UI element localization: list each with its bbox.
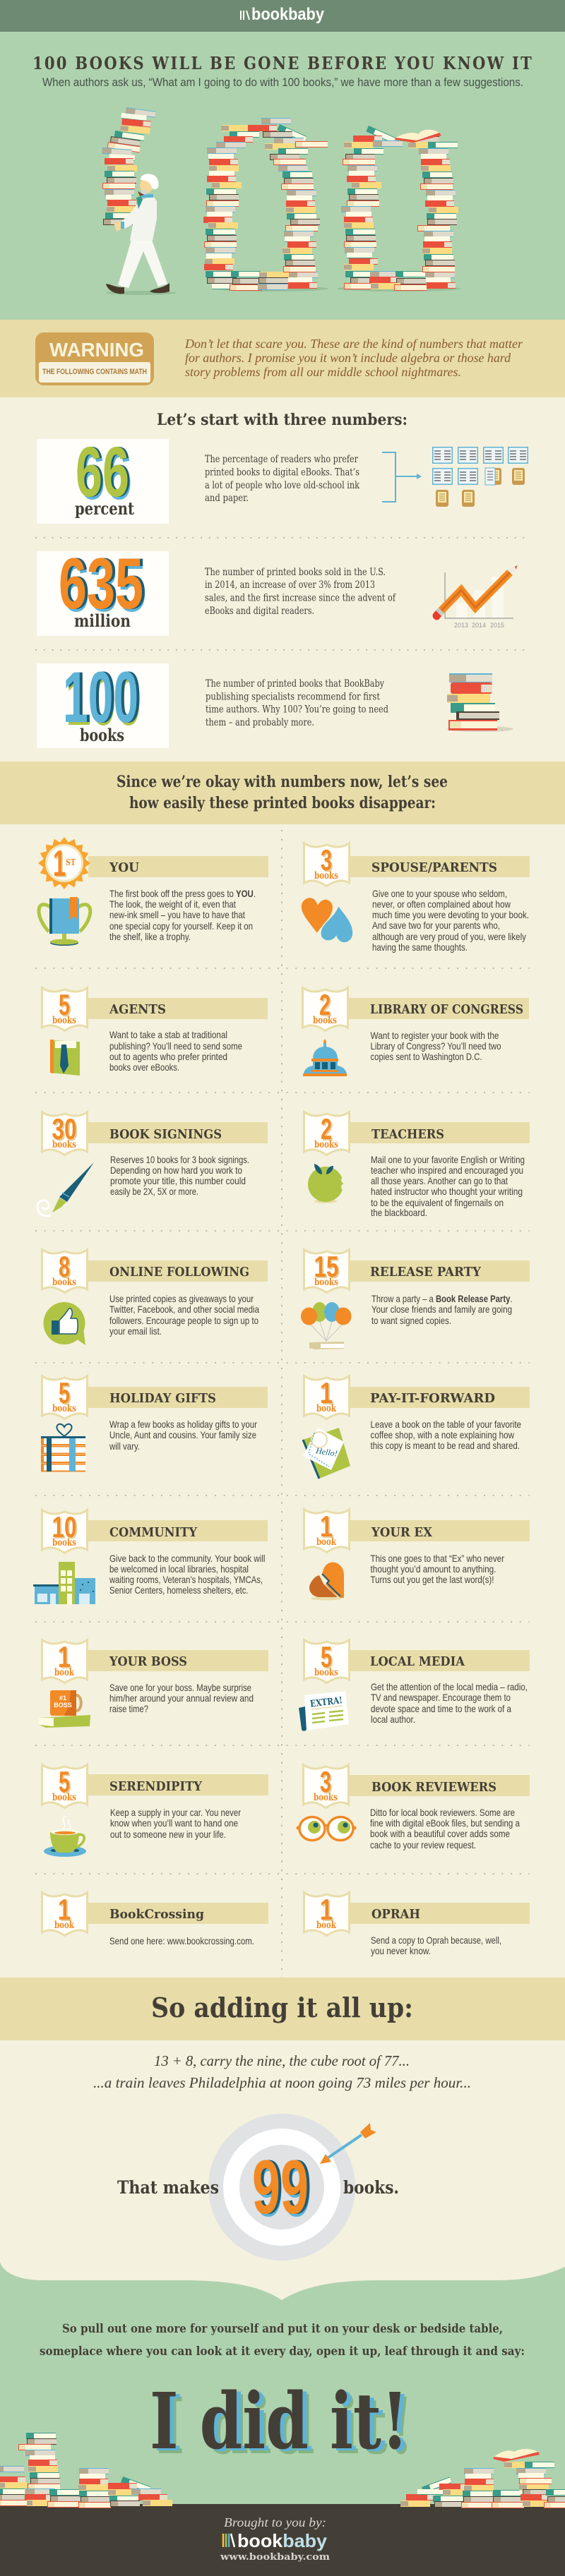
- text: [110, 1807, 241, 1840]
- badge: 1 book: book: [316, 1403, 336, 1414]
- badge: 2 books: [302, 988, 347, 1030]
- stat: 635 million: [37, 543, 169, 636]
- text: out to agents who prefer printed: [109, 1051, 227, 1062]
- text: that makes: That makes: [117, 2177, 219, 2198]
- text: [371, 1154, 525, 1218]
- card: book signings: BOOK SIGNINGS: [109, 1127, 222, 1142]
- text: [109, 888, 256, 942]
- text: new-ink smell – you have to have that: [109, 909, 245, 920]
- warning badge: [35, 332, 154, 385]
- card: serendipity: [42, 1764, 268, 1857]
- badge: 3 books: 3: [322, 845, 333, 878]
- stat: 635 million: 635: [61, 543, 146, 624]
- text: The look, the weight of it, even that: [109, 898, 236, 910]
- text: [370, 1030, 501, 1062]
- icon: eyeglasses: [297, 1817, 356, 1841]
- text: Leave a book on the table of your favorite: [370, 1419, 521, 1430]
- stat: 635 million: 635: [61, 546, 146, 627]
- text: Depending on how hard you work to: [110, 1164, 242, 1176]
- badge: 1 book: book: [316, 1920, 336, 1931]
- badge: 5 books: books: [52, 1792, 76, 1803]
- icon: book with note: [303, 1428, 350, 1479]
- card: spouse and parents: [301, 843, 530, 953]
- badge: 1 book: 1: [320, 1893, 333, 1926]
- icon: boss mug on book: #1: [59, 1695, 66, 1702]
- text: although are very proud of you, were likely: [372, 931, 526, 942]
- chart: pencil sales line: 2013: [454, 622, 468, 629]
- text: Ditto for local book reviewers. Some are: [370, 1807, 515, 1818]
- text: raise time?: [109, 1703, 148, 1714]
- stat: 66 percent: 66: [76, 433, 129, 512]
- icon: boss mug on book: BOSS: [54, 1702, 72, 1709]
- text: Want to register your book with the: [370, 1030, 499, 1041]
- stat: 66 percent: [37, 433, 169, 524]
- badge: 30 books: 30: [54, 1114, 78, 1147]
- text: Uncle, Aunt and cousins. Your family size: [109, 1429, 256, 1440]
- icon: book trophy: [39, 897, 90, 946]
- stat: 100 books: [37, 657, 169, 748]
- badge: 3 books: [304, 1764, 349, 1808]
- badge: 3 books: 3: [321, 843, 332, 877]
- badge: 1st: [38, 837, 90, 889]
- text: Senior Centers, homeless shelters, etc.: [109, 1584, 249, 1596]
- badge: 1 book: book: [316, 1536, 336, 1548]
- text: one special copy for yourself. Keep it on: [109, 920, 253, 932]
- chart: pencil sales line: 2015: [490, 622, 504, 629]
- card: release party: RELEASE PARTY: [370, 1265, 482, 1280]
- joke lines: [93, 2052, 471, 2091]
- icon: books versus ebooks: [382, 447, 528, 507]
- badge: 3 books: 3: [320, 1765, 331, 1798]
- badge: 15 books: 15: [315, 1251, 340, 1284]
- badge: 5 books: books: [314, 1667, 338, 1678]
- text: [371, 1934, 501, 1956]
- badge: 30 books: [42, 1112, 88, 1155]
- closing text: [40, 2322, 525, 2359]
- icon: fountain pen: [37, 1162, 94, 1216]
- card: serendipity: SERENDIPITY: [109, 1779, 203, 1794]
- text: waiting rooms, Veteran’s hospitals, YMCAs,: [109, 1574, 263, 1585]
- headline: I did it: I did it!: [150, 2376, 408, 2467]
- icon: balloons on a book: [301, 1302, 352, 1349]
- panel: total calculation: [0, 2040, 565, 2300]
- badge: 1 book: [42, 1893, 88, 1935]
- panel: adding it up heading: [0, 1978, 565, 2040]
- badge: 5 books: 5: [322, 1642, 333, 1675]
- card: you: [38, 837, 268, 946]
- badge: 2 books: 2: [321, 1112, 332, 1145]
- text: Send one here: www.bookcrossing.com.: [109, 1935, 254, 1946]
- icon: stack of books: [447, 673, 513, 732]
- text: coffee shop, with a note explaining how: [370, 1429, 515, 1440]
- text: [372, 888, 529, 953]
- badge: 1st: 1: [54, 845, 67, 886]
- badge: 5 books: 5: [60, 1378, 71, 1411]
- panel: disappear heading: how easily these printed books disappear:: [129, 794, 436, 812]
- panel: footer: [0, 2504, 565, 2576]
- panel: disappear heading: Since we’re okay with numbers now, let’s see: [117, 773, 448, 791]
- text: Reserves 10 books for 3 book signings.: [110, 1154, 249, 1165]
- subtitle: When authors ask us, “What am I going to do with 100 books,” we have more than a few suggestions.: [42, 76, 523, 89]
- badge: 10 books: books: [52, 1537, 76, 1548]
- card: book reviewers: [297, 1764, 530, 1850]
- text: [371, 1681, 528, 1725]
- badge: 5 books: [42, 1376, 88, 1419]
- stat text: 635 million: The number of printed books sold in the U.S.: [205, 567, 386, 578]
- badge: 3 books: 3: [321, 1767, 333, 1800]
- card: holiday gifts: [41, 1376, 268, 1472]
- badge: 5 books: 5: [321, 1640, 332, 1673]
- badge: 1 book: 1: [321, 1378, 334, 1411]
- text: This one goes to that “Ex” who never: [370, 1553, 504, 1564]
- text: promote your title, this number could: [110, 1175, 246, 1186]
- badge: 2 books: 2: [322, 1114, 333, 1147]
- warning text: [184, 337, 523, 379]
- badge: 3 books: books: [314, 870, 338, 881]
- badge: 1 book: book: [54, 1920, 74, 1931]
- text: [110, 1154, 249, 1197]
- text: Send a copy to Oprah because, well,: [371, 1934, 501, 1946]
- stat: 100 books: 100: [66, 660, 141, 740]
- badge: 2 books: books: [313, 1015, 337, 1026]
- text: [371, 1293, 513, 1326]
- icon: newspaper: EXTRA!: [309, 1695, 343, 1710]
- panel: warning: [0, 320, 565, 397]
- card: spouse and parents: SPOUSE/PARENTS: [371, 860, 497, 875]
- text: followers. Encourage people to sign up to: [109, 1315, 258, 1326]
- card: oprah: [304, 1893, 530, 1956]
- text: Turns out you get the last word(s)!: [370, 1574, 494, 1585]
- badge: 1 book: 1: [59, 1642, 72, 1675]
- badge: 15 books: 15: [314, 1250, 339, 1283]
- card: pay it forward: PAY-IT-FORWARD: [370, 1391, 495, 1406]
- badge: 3 books: [304, 843, 349, 886]
- illustration: open book on the pile: [493, 2449, 540, 2462]
- text: cache to your review request.: [370, 1839, 476, 1850]
- text: TV and newspaper. Encourage them to: [371, 1692, 511, 1703]
- badge: 1 book: 1: [320, 1510, 333, 1543]
- card: your boss: YOUR BOSS: [109, 1654, 187, 1669]
- badge: 2 books: [304, 1112, 349, 1155]
- card: agents: [42, 988, 268, 1076]
- stat text: 635 million: in 2014, an increase of over 3% from 2013: [205, 579, 375, 591]
- card: book signings: [37, 1112, 268, 1216]
- card: online following: ONLINE FOLLOWING: [109, 1265, 249, 1280]
- badge: 1 book: 1: [59, 1894, 72, 1927]
- card: pay it forward: [303, 1376, 530, 1479]
- text: website: www.bookbaby.com: [220, 2552, 330, 2563]
- badge: 1 book: [304, 1376, 349, 1419]
- card: local media: LOCAL MEDIA: [370, 1654, 465, 1669]
- text: Mail one to your favorite English or Writing: [371, 1154, 525, 1165]
- text: Twitter, Facebook, and other social media: [109, 1304, 259, 1315]
- icon: thumbs up bubble: [44, 1302, 85, 1345]
- joke lines: ...a train leaves Philadelphia at noon going 73 miles per hour...: [93, 2074, 471, 2091]
- icon: wrapped books: [41, 1424, 85, 1472]
- text: Keep a supply in your car. You never: [110, 1807, 241, 1818]
- text: brought to you by: Brought to you by:: [224, 2515, 326, 2529]
- badge: 2 books: books: [314, 1139, 338, 1150]
- card: your ex: [304, 1509, 530, 1601]
- panel: hero: [0, 32, 565, 320]
- panel: header bar: [0, 0, 565, 32]
- text: hated instructor who thought your writing: [371, 1186, 523, 1197]
- target with 99: [208, 2114, 355, 2261]
- badge: 2 books: 2: [321, 989, 332, 1023]
- text: books over eBooks.: [109, 1061, 179, 1073]
- text: be welcomed in local libraries, hospital: [109, 1563, 249, 1575]
- icon: town buildings: [33, 1562, 95, 1604]
- text: to be the equivalent of fingernails on: [371, 1197, 504, 1208]
- stat text: 66 percent: [205, 454, 359, 504]
- logo: bookbaby colour: bookbaby: [237, 2530, 328, 2551]
- stat: 635 million: 635: [59, 543, 143, 624]
- stat: 635 million: million: [74, 610, 131, 631]
- text: [370, 1419, 521, 1451]
- card: your boss: [39, 1640, 268, 1728]
- text: Library of Congress? You’ll need two: [370, 1040, 501, 1052]
- illustration: right book pile: [400, 2449, 565, 2508]
- card: agents: AGENTS: [109, 1002, 166, 1017]
- card: community: [33, 1510, 268, 1604]
- panel: closing message: [0, 2255, 565, 2504]
- panel: three numbers: [0, 397, 565, 762]
- stat text: 66 percent: and paper.: [205, 493, 249, 504]
- text: Wrap a few books as holiday gifts to your: [109, 1419, 257, 1430]
- text: The first book off the press goes to YOU.: [109, 888, 256, 899]
- text: And save two for your parents who,: [372, 920, 500, 931]
- stat text: 100 books: time authors. Why 100? You’re going to need: [206, 704, 388, 716]
- headline: I did it: I did it!: [156, 2381, 415, 2472]
- stat text: 100 books: them – and probably more.: [206, 717, 314, 728]
- badge: 8 books: books: [52, 1277, 76, 1288]
- text: Use printed copies as giveaways to your: [109, 1293, 254, 1304]
- card: bookcrossing: BookCrossing: [109, 1907, 204, 1922]
- text: him/her around your annual review and: [109, 1692, 254, 1704]
- text: Give one to your spouse who seldom,: [372, 888, 507, 899]
- text: out to someone new in your life.: [110, 1829, 226, 1840]
- badge: 1 book: 1: [321, 1894, 334, 1927]
- badge: 30 books: 30: [52, 1112, 76, 1145]
- badge: 8 books: 8: [59, 1250, 70, 1283]
- text: local author.: [371, 1714, 415, 1725]
- text: devote space and time to the work of a: [371, 1703, 511, 1714]
- warning text: for authors. I promise you it won’t include algebra or those hard: [185, 351, 511, 365]
- text: will vary.: [109, 1440, 140, 1452]
- illustration: second zero made of books: [341, 126, 458, 291]
- text: [109, 1029, 242, 1073]
- stat: 100 books: 100: [63, 657, 138, 738]
- badge: 1 book: [304, 1509, 349, 1553]
- text: Save one for your boss. Maybe surprise: [109, 1682, 251, 1693]
- illustration: stack carried by the man: [102, 107, 156, 225]
- card: local media: [299, 1640, 530, 1731]
- text: Give back to the community. Your book will: [109, 1553, 266, 1564]
- illustration: ground shadows: [106, 286, 461, 295]
- badge: 5 books: books: [52, 1403, 76, 1414]
- text: having the same thoughts.: [372, 941, 468, 953]
- icon: newspaper: [299, 1691, 349, 1731]
- text: Want to take a stab at traditional: [109, 1029, 227, 1040]
- joke lines: 13 + 8, carry the nine, the cube root of 77...: [154, 2052, 410, 2069]
- target with 99: 99: [255, 2144, 311, 2229]
- logo: bookbaby: bookbaby: [251, 5, 325, 24]
- badge: 5 books: 5: [60, 1767, 71, 1800]
- icon: boss mug on book: [39, 1690, 90, 1728]
- icon: apple: [308, 1164, 348, 1203]
- stat text: 66 percent: printed books to digital eBooks. That’s: [205, 467, 359, 479]
- text: Get the attention of the local media – radio,: [371, 1681, 528, 1692]
- badge: 8 books: 8: [60, 1251, 71, 1284]
- text: [109, 1293, 259, 1337]
- stat: 100 books: books: [80, 725, 124, 745]
- badge: 1 book: 1: [320, 1376, 333, 1409]
- card: book reviewers: BOOK REVIEWERS: [371, 1780, 496, 1795]
- card: teachers: [304, 1112, 530, 1218]
- text: thought you’d amount to anything.: [370, 1563, 496, 1575]
- icon: coffee cup: [44, 1816, 86, 1857]
- badge: 1 book: [42, 1640, 88, 1683]
- text: [370, 1807, 520, 1850]
- text: you never know.: [371, 1945, 431, 1956]
- text: all those years. Another can go to that: [371, 1175, 508, 1186]
- badge: 10 books: 10: [52, 1510, 76, 1543]
- closing text: So pull out one more for yourself and put it on your desk or bedside table,: [62, 2322, 503, 2336]
- badge: 1 book: [304, 1893, 349, 1935]
- text: [109, 1682, 254, 1714]
- text: this copy is meant to be read and shared.: [370, 1440, 520, 1451]
- icon: two hearts: [301, 898, 353, 943]
- stat text: 100 books: [206, 678, 388, 728]
- card: holiday gifts: HOLIDAY GIFTS: [109, 1391, 216, 1406]
- card: oprah: OPRAH: [371, 1907, 420, 1922]
- panel: where the books go: [0, 824, 565, 1978]
- chart: pencil sales line: [433, 565, 517, 629]
- icon: capitol building: [303, 1039, 347, 1076]
- stat: 66 percent: 66: [78, 433, 131, 512]
- target with 99: 99: [255, 2147, 311, 2232]
- text: Throw a party – a Book Release Party.: [371, 1293, 513, 1304]
- stat text: 66 percent: a lot of people who love old-school ink: [205, 480, 359, 491]
- target with 99: 99: [252, 2144, 309, 2229]
- text: to want signed copies.: [371, 1315, 451, 1326]
- panel: disappear heading: [0, 762, 565, 824]
- badge: 5 books: 5: [59, 1765, 70, 1798]
- card: release party: [301, 1249, 530, 1349]
- illustration: open book on top of the zero: [395, 130, 441, 143]
- text: easily be 2X, 5X or more.: [110, 1186, 198, 1197]
- card: teachers: TEACHERS: [371, 1127, 444, 1142]
- text: never, or often complained about how: [372, 898, 511, 910]
- badge: 2 books: 2: [319, 988, 331, 1021]
- text: copies sent to Washington D.C.: [370, 1051, 482, 1062]
- stat text: 635 million: sales, and the first increase since the advent of: [205, 593, 396, 604]
- badge: 1 book: book: [54, 1667, 74, 1678]
- text: [109, 1419, 257, 1452]
- card: library of congress: LIBRARY OF CONGRESS: [370, 1002, 523, 1017]
- card: online following: [42, 1249, 268, 1345]
- text: Your close friends and family are going: [371, 1304, 512, 1315]
- text: book with a beautiful cover adds some: [370, 1828, 510, 1839]
- warning badge: WARNING: [49, 339, 144, 361]
- badge: 5 books: 5: [60, 989, 71, 1023]
- stat text: 635 million: eBooks and digital readers.: [205, 606, 314, 617]
- card: community: COMMUNITY: [109, 1525, 198, 1540]
- text: the shelf, like a trophy.: [109, 931, 191, 942]
- text: your email list.: [109, 1325, 162, 1337]
- icon: book with tie: [50, 1040, 80, 1076]
- badge: 10 books: [42, 1510, 88, 1553]
- stat: 66 percent: 66: [78, 435, 132, 514]
- arrow: [320, 2123, 376, 2164]
- badge: 30 books: books: [52, 1139, 76, 1150]
- badge: 10 books: 10: [54, 1512, 78, 1545]
- card: bookcrossing: [42, 1893, 268, 1946]
- stat text: 100 books: The number of printed books that BookBaby: [206, 678, 385, 690]
- chart: pencil sales line: 2014: [472, 622, 486, 629]
- icon: book with note: Hello!: [314, 1445, 338, 1459]
- card: library of congress: [302, 988, 529, 1076]
- warning text: Don’t let that scare you. These are the kind of numbers that matter: [184, 337, 523, 351]
- icon: broken heart: [309, 1563, 344, 1601]
- badge: 15 books: [304, 1249, 349, 1293]
- stat: 100 books: 100: [66, 657, 141, 738]
- stat text: 66 percent: The percentage of readers who prefer: [205, 454, 359, 465]
- badge: 1 book: 1: [58, 1893, 71, 1926]
- text: books: books.: [343, 2177, 399, 2198]
- badge: 1st: 1: [53, 843, 66, 884]
- illustration: first zero made of books: [203, 118, 328, 291]
- text: publishing? You’ll need to send some: [109, 1040, 242, 1052]
- warning badge: THE FOLLOWING CONTAINS MATH: [42, 368, 147, 376]
- illustration: left book pile: [0, 2433, 172, 2508]
- badge: 5 books: books: [52, 1015, 76, 1026]
- badge: 5 books: [42, 988, 88, 1030]
- heading: Let’s start with three numbers:: [157, 411, 408, 429]
- stat: 66 percent: percent: [75, 498, 134, 519]
- badge: 5 books: [304, 1640, 349, 1683]
- stat text: 635 million: [205, 567, 396, 617]
- panel: adding it up heading: So adding it all up:: [151, 1992, 413, 2023]
- card: your ex: YOUR EX: [371, 1525, 432, 1540]
- headline: I did it: I did it!: [154, 2378, 412, 2469]
- badge: 1 book: 1: [321, 1511, 334, 1544]
- stat text: 100 books: publishing specialists recommend for first: [206, 692, 380, 703]
- text: teacher who inspired and encouraged you: [371, 1164, 523, 1176]
- badge: 8 books: [42, 1249, 88, 1293]
- text: know when you’ll want to hand one: [110, 1817, 238, 1829]
- badge: 1 book: 1: [58, 1640, 71, 1673]
- warning text: story problems from all our middle school nightmares.: [185, 365, 461, 379]
- card: you: YOU: [109, 860, 139, 875]
- text: [109, 1553, 266, 1596]
- badge: 5 books: 5: [59, 1376, 70, 1409]
- text: the blackboard.: [371, 1207, 427, 1218]
- text: fine with digital eBook files, but sending a: [370, 1817, 520, 1829]
- illustration: man in white suit: [106, 174, 170, 294]
- badge: 1st: ST: [66, 857, 76, 867]
- badge: 3 books: books: [314, 1792, 338, 1803]
- text: much time you were devoting to your book.: [372, 909, 529, 920]
- badge: 15 books: books: [314, 1277, 338, 1288]
- badge: 5 books: 5: [59, 988, 70, 1021]
- text: [370, 1553, 504, 1585]
- badge: 5 books: [42, 1764, 88, 1808]
